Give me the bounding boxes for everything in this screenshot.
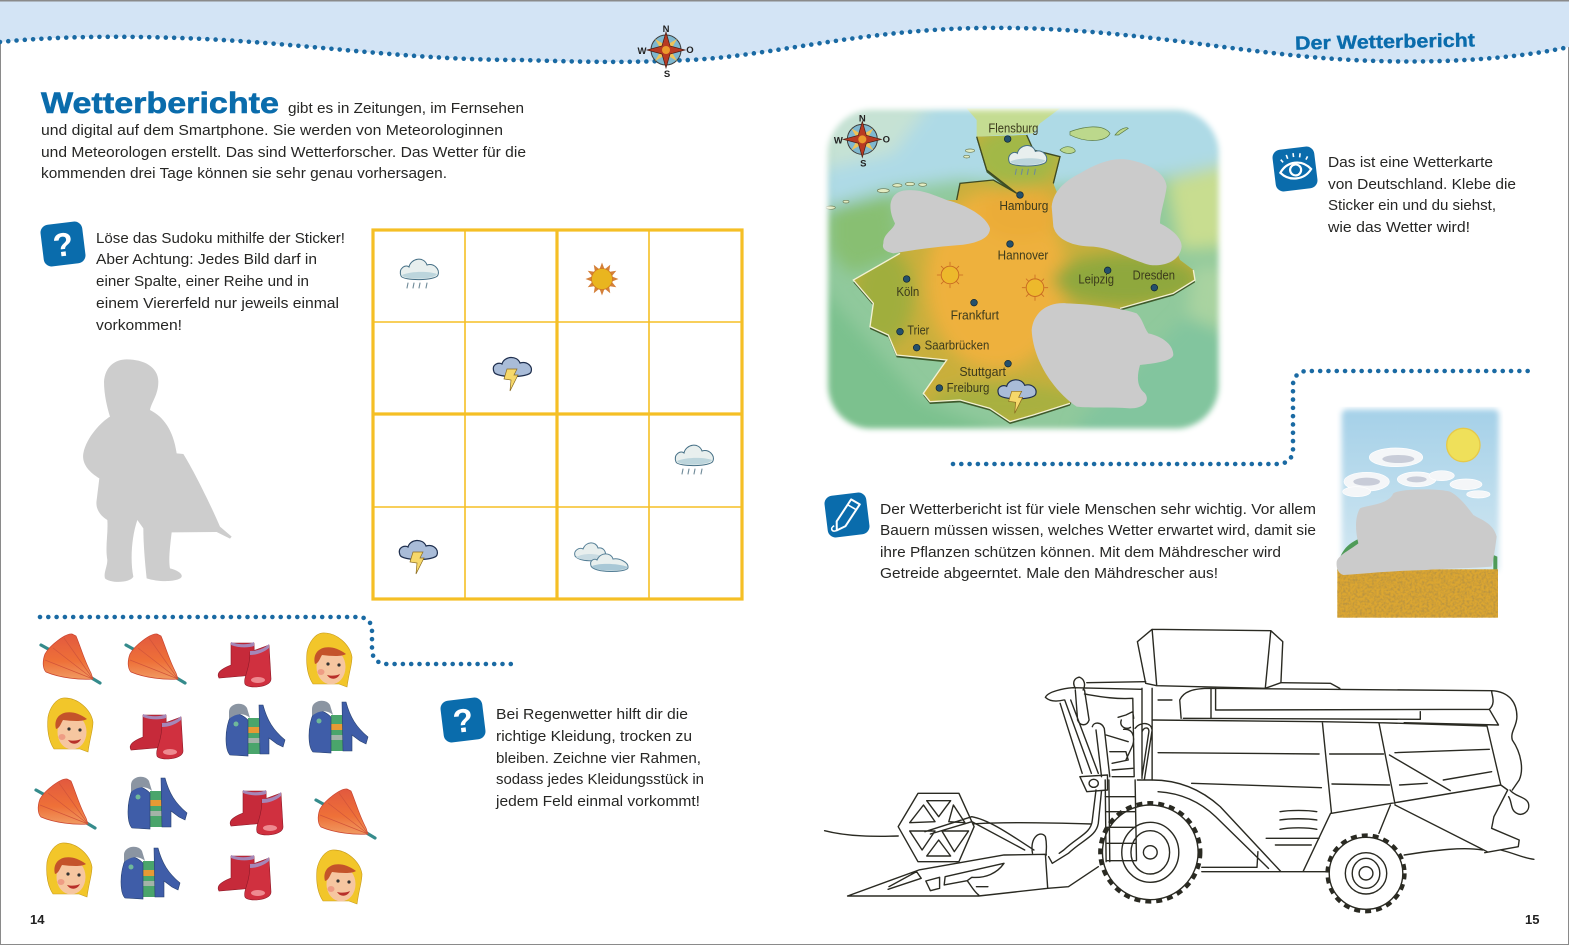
city markers	[897, 136, 1158, 391]
sticker placeholder west	[883, 190, 990, 253]
hills	[1337, 538, 1497, 570]
icon: map rain cloud	[1009, 146, 1047, 174]
harvester explanation text: Getreide abgeerntet. Male den Mähdrescher aus!	[880, 565, 1218, 582]
boots	[230, 790, 283, 835]
harvester explanation text: Der Wetterbericht ist für viele Menschen sehr wichtig. Vor allem	[880, 501, 1316, 518]
city labels: Hamburg	[999, 198, 1048, 213]
header table	[848, 854, 1098, 896]
city labels: Hannover	[998, 247, 1049, 262]
dotted divider right	[953, 371, 1530, 464]
clothing instructions: bleiben. Zeichne vier Rahmen,	[496, 750, 701, 767]
harvester explanation text: Bauern müssen wissen, welches Wetter erwartet wird, damit sie	[880, 522, 1316, 539]
Denmark and islands	[967, 108, 1060, 137]
city labels: Dresden	[1133, 267, 1175, 282]
sticker placeholder south-east	[1032, 303, 1173, 408]
city labels: Trier	[907, 322, 930, 337]
icon: map sun east	[1022, 275, 1048, 300]
icon: sun	[586, 262, 618, 296]
Germany landmass	[852, 134, 1196, 424]
clothing instructions: jedem Feld einmal vorkommt!	[495, 793, 700, 810]
boots	[218, 642, 271, 687]
reel	[898, 793, 974, 862]
map explanation text: von Deutschland. Klebe die	[1328, 176, 1516, 193]
sticker silhouette: child with umbrella	[83, 359, 232, 582]
access ladder	[1105, 780, 1136, 862]
umbrella	[36, 779, 95, 828]
intro text block: und digital auf dem Smartphone. Sie werden von Meteorologinnen	[41, 122, 503, 139]
jacket	[226, 704, 285, 756]
city labels: Frankfurt	[951, 307, 999, 322]
colouring drawing: combine harvester	[825, 629, 1534, 911]
clouds	[1343, 448, 1490, 498]
sun	[1447, 428, 1480, 462]
grain hopper	[1137, 629, 1283, 688]
umbrella	[316, 789, 375, 838]
section heading: Der Wetterbericht	[1295, 30, 1476, 55]
harvester explanation text	[880, 501, 1316, 582]
city labels: Leipzig	[1078, 271, 1114, 286]
clothing instructions: richtige Kleidung, trocken zu	[496, 728, 692, 745]
icon: clouds	[575, 543, 628, 572]
city labels: Köln	[896, 284, 919, 299]
boots	[218, 855, 271, 900]
header band	[0, 0, 1569, 62]
page number left: 14	[30, 912, 45, 927]
clothing instructions: sodass jedes Kleidungsstück in	[496, 771, 704, 788]
icon: question mark clothing: ?	[451, 701, 475, 740]
icon: question mark clothing	[440, 697, 486, 743]
icon: thunderstorm	[493, 357, 531, 391]
sudoku instructions: einem Viererfeld nur jeweils einmal	[96, 295, 339, 312]
icon: question mark sudoku: ?	[51, 225, 75, 264]
sudoku instructions: Aber Achtung: Jedes Bild darf in	[96, 251, 317, 268]
boots	[130, 714, 183, 759]
child face	[48, 698, 93, 752]
jacket	[309, 701, 368, 753]
child face	[307, 633, 352, 687]
intro text block: gibt es in Zeitungen, im Fernsehen	[288, 100, 524, 117]
clothing puzzle grid	[36, 633, 375, 904]
icon: map compass	[834, 113, 890, 169]
jacket	[121, 847, 180, 899]
intro text block: und Meteorologen erstellt. Das sind Wetterforscher. Das Wetter für die	[41, 144, 526, 161]
sudoku instructions	[96, 230, 345, 334]
city labels: Freiburg	[947, 380, 989, 395]
city labels: Flensburg	[988, 120, 1038, 135]
intro text block: Wetterberichte	[41, 87, 279, 120]
rear wheel	[1327, 835, 1405, 911]
wheat field	[1337, 569, 1498, 618]
icon: header compass	[638, 24, 694, 80]
icon: question mark sudoku	[40, 221, 86, 267]
sudoku grid	[372, 230, 742, 599]
map explanation text: wie das Wetter wird!	[1327, 219, 1470, 236]
sticker placeholder north-east	[1052, 159, 1182, 265]
ground lines	[825, 823, 1534, 859]
sudoku instructions: Löse das Sudoku mithilfe der Sticker!	[96, 230, 345, 247]
clothing instructions: Bei Regenwetter hilft dir die	[496, 706, 688, 723]
cab and driver	[1045, 677, 1172, 792]
icon: rain cloud	[675, 445, 713, 474]
icon: thunderstorm	[399, 540, 437, 574]
dotted divider left	[40, 617, 515, 664]
harvester explanation text: ihre Pflanzen schützen können. Mit dem Mähdrescher wird	[880, 544, 1281, 561]
icon: eye	[1272, 146, 1318, 192]
map explanation text	[1327, 154, 1516, 236]
city labels: Stuttgart	[959, 364, 1006, 379]
icon: map thunderstorm	[998, 380, 1036, 413]
city labels: Saarbrücken	[925, 337, 989, 352]
map explanation text: Sticker ein und du siehst,	[1328, 197, 1496, 214]
icon: rain cloud	[400, 259, 438, 288]
child face	[317, 850, 362, 904]
sudoku instructions: vorkommen!	[96, 317, 182, 334]
intro text block: kommenden drei Tage können sie sehr genau vorhersagen.	[41, 165, 447, 182]
machine body	[1087, 682, 1529, 872]
sudoku instructions: einer Spalte, einer Reihe und in	[96, 273, 309, 290]
hydraulic hoses	[1049, 790, 1102, 863]
intro text block	[41, 87, 526, 182]
page number right: 15	[1525, 912, 1539, 927]
field picture with sticker placeholder	[1337, 407, 1503, 618]
umbrella	[126, 634, 185, 683]
jacket	[128, 777, 187, 829]
icon: map sun west	[937, 262, 963, 288]
sticker placeholder harvester	[1337, 489, 1497, 575]
child face	[47, 843, 92, 897]
front wheel	[1100, 803, 1200, 902]
city labels	[896, 120, 1175, 395]
map explanation text: Das ist eine Wetterkarte	[1328, 154, 1493, 171]
icon: pencil	[824, 492, 870, 538]
clothing instructions	[495, 706, 704, 810]
weather map of Germany	[820, 100, 1230, 440]
umbrella	[41, 634, 100, 683]
